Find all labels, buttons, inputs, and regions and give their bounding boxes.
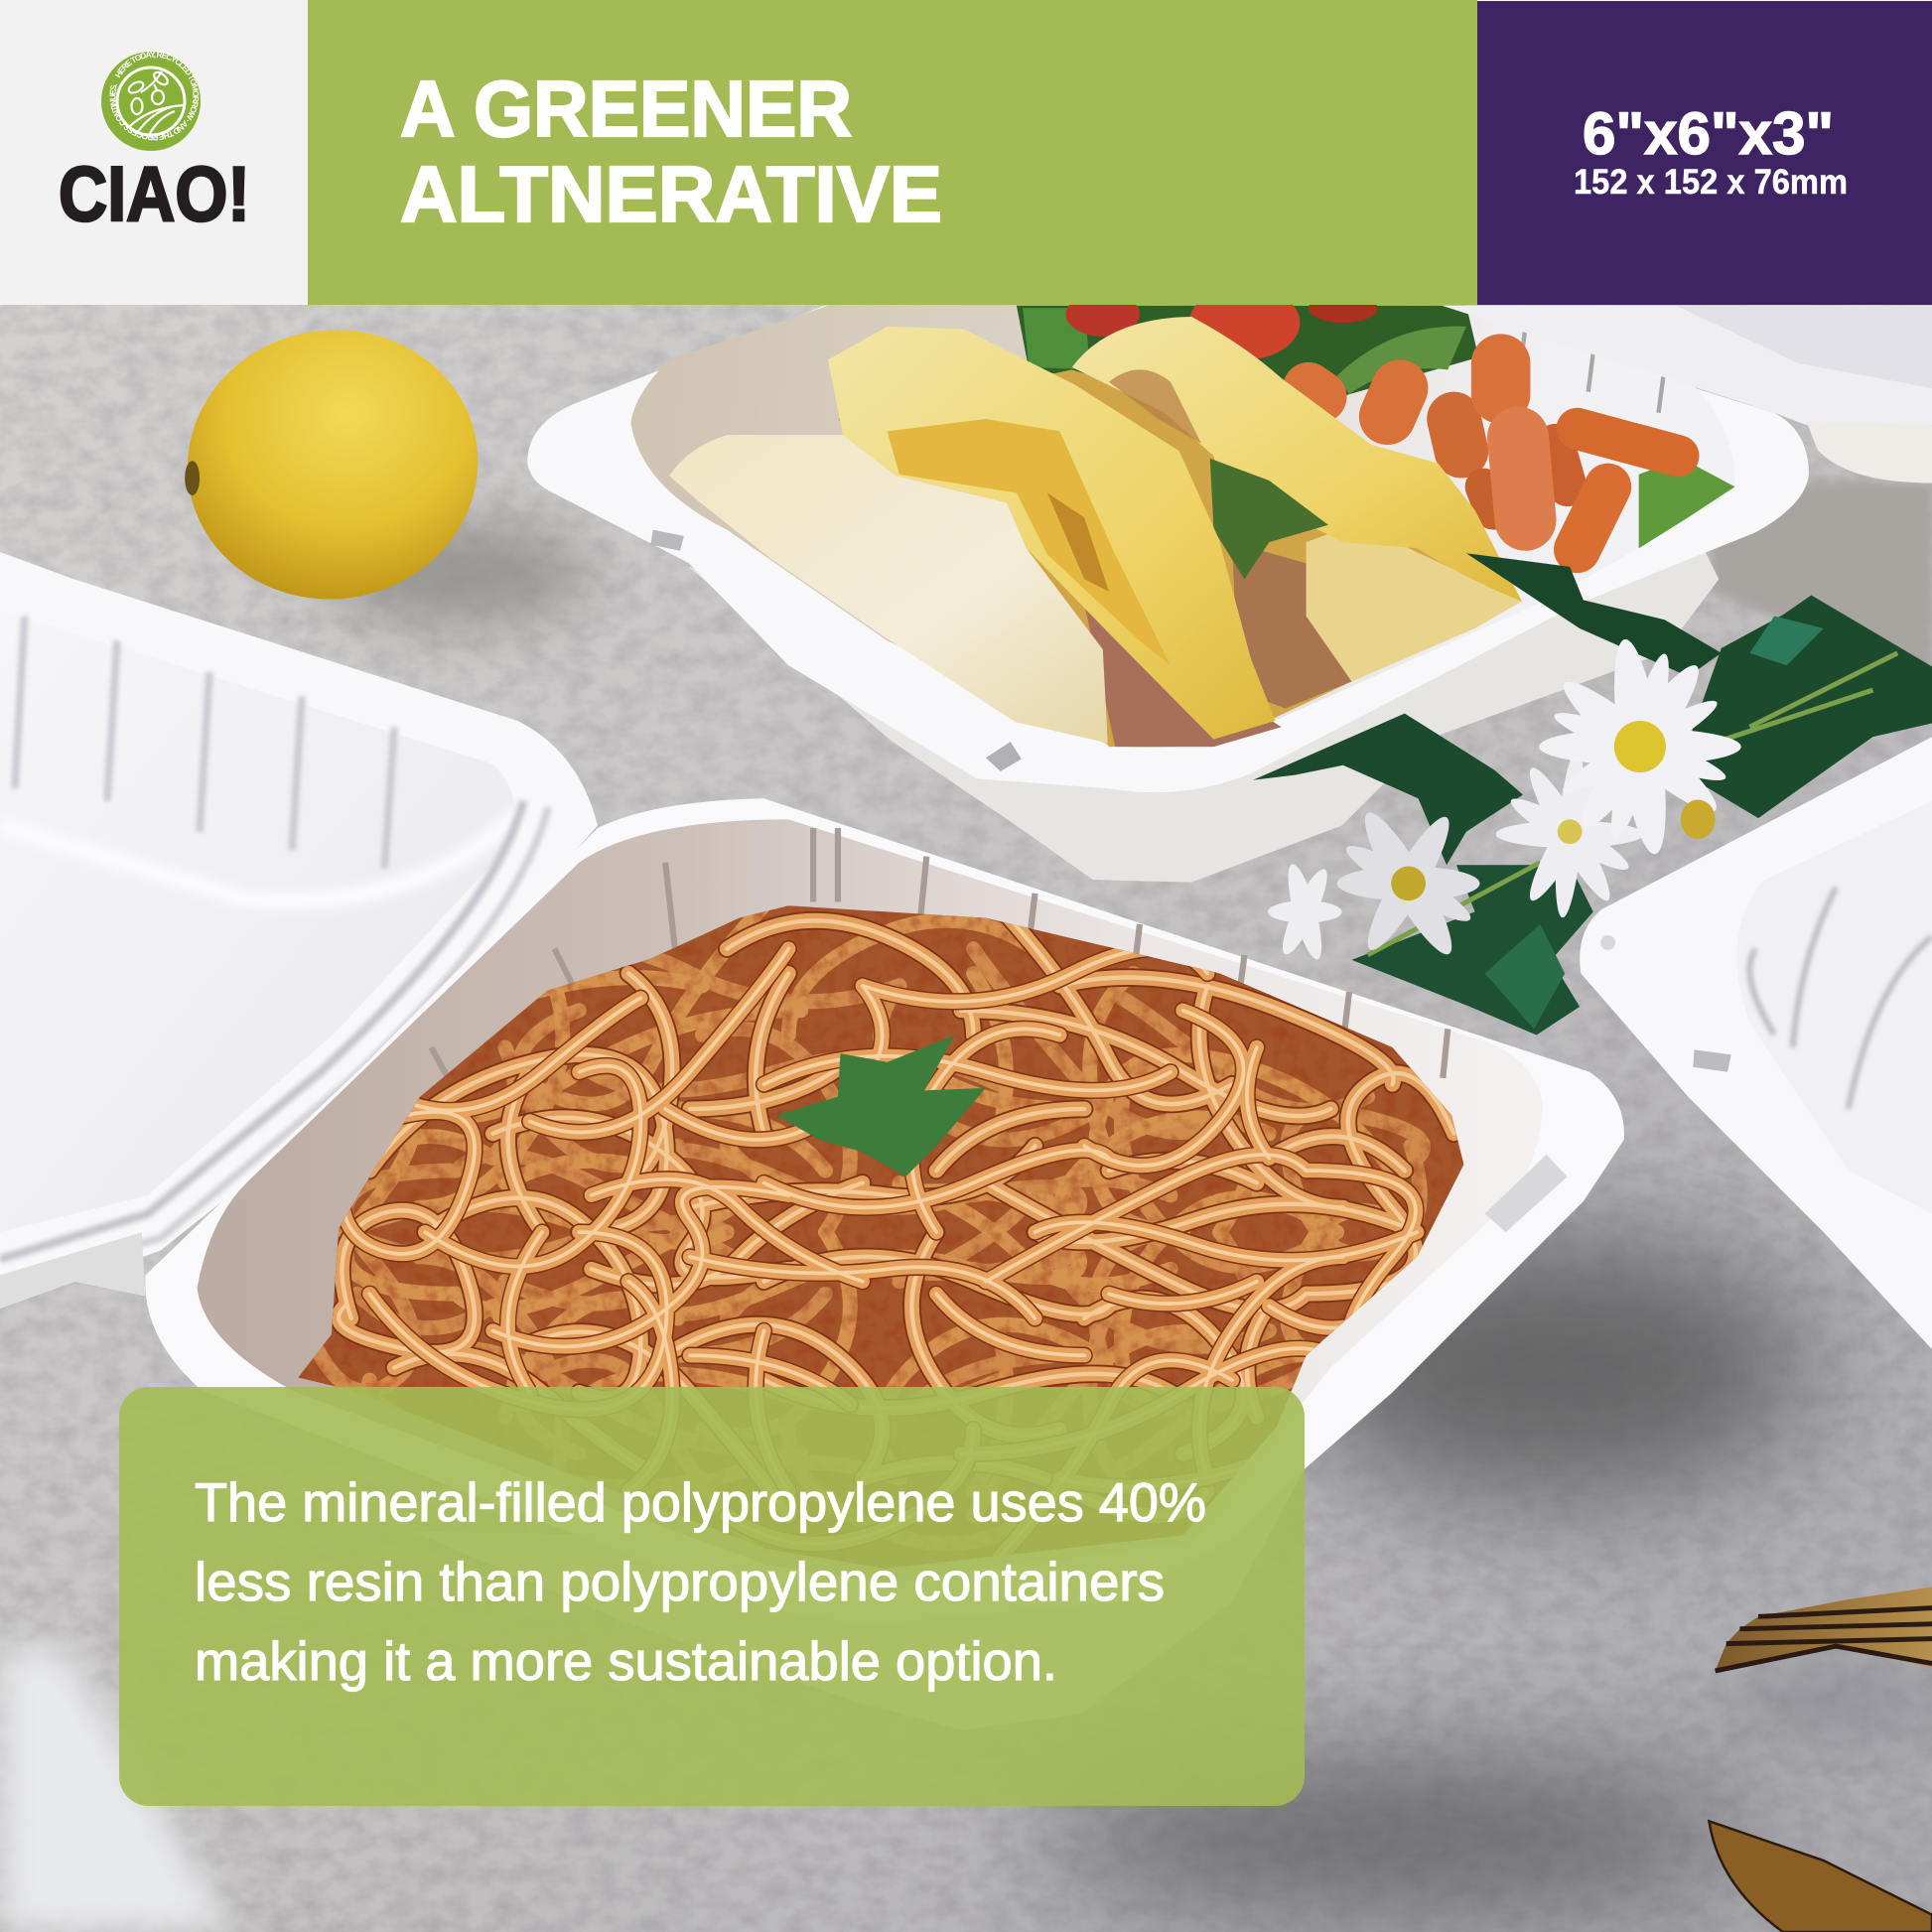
tray cavity — [198, 819, 1543, 1584]
bottom clamshell with spaghetti — [145, 798, 1624, 1730]
taco underlay — [838, 369, 1522, 747]
daisy middle — [1496, 750, 1644, 918]
tortilla middle — [828, 327, 1276, 740]
callout text: making it a more sustainable option. — [195, 1630, 1057, 1692]
clips — [650, 530, 684, 551]
container body — [689, 542, 1719, 883]
daisy large — [1539, 636, 1741, 857]
spaghetti — [271, 888, 1491, 1626]
callout text: The mineral-filled polypropylene uses 40% — [195, 1471, 1206, 1533]
salad — [1017, 286, 1734, 548]
callout: material note — [119, 1387, 1305, 1806]
knife — [1709, 1821, 1932, 1932]
title text — [400, 65, 942, 238]
header panel: dimensions — [1477, 1, 1932, 305]
size in inches: 6"x6"x3" — [1583, 100, 1834, 167]
logo badge: HERE TODAY, RECYCLED TOMORROW · AND THE PROCESS CONTINUES. — [109, 52, 199, 141]
top clamshell container with tacos and carrots — [527, 286, 1809, 883]
lemon — [185, 330, 479, 600]
size in millimetres: 152 x 152 x 76mm — [1574, 163, 1848, 202]
title text: A GREENER — [400, 65, 852, 153]
tortilla right — [1072, 317, 1522, 602]
mint leaf — [776, 1035, 986, 1176]
daisy left — [1337, 804, 1480, 962]
header panel: logo — [0, 0, 308, 305]
tortilla left — [669, 435, 1108, 743]
title text: ALTNERATIVE — [400, 150, 942, 238]
taco fillings — [1084, 523, 1522, 747]
green vegetable in taco — [1210, 459, 1328, 579]
open lid left — [0, 552, 598, 1309]
daisy small — [1268, 862, 1342, 962]
tray lip — [145, 798, 1624, 1625]
container cavity — [630, 306, 1735, 748]
container lip — [527, 306, 1809, 792]
brand wordmark: CIAO! — [59, 150, 250, 237]
fork — [1716, 1587, 1932, 1671]
callout text: less resin than polypropylene containers — [195, 1551, 1165, 1612]
tray body — [413, 1468, 1305, 1730]
tab — [1485, 1155, 1568, 1232]
callout text — [195, 1471, 1206, 1692]
flowers and leaves — [1253, 553, 1932, 1035]
right closed container — [1580, 737, 1932, 1349]
carrots — [1309, 363, 1678, 550]
header panel: title — [308, 0, 1477, 305]
right upper lid — [1442, 306, 1932, 483]
